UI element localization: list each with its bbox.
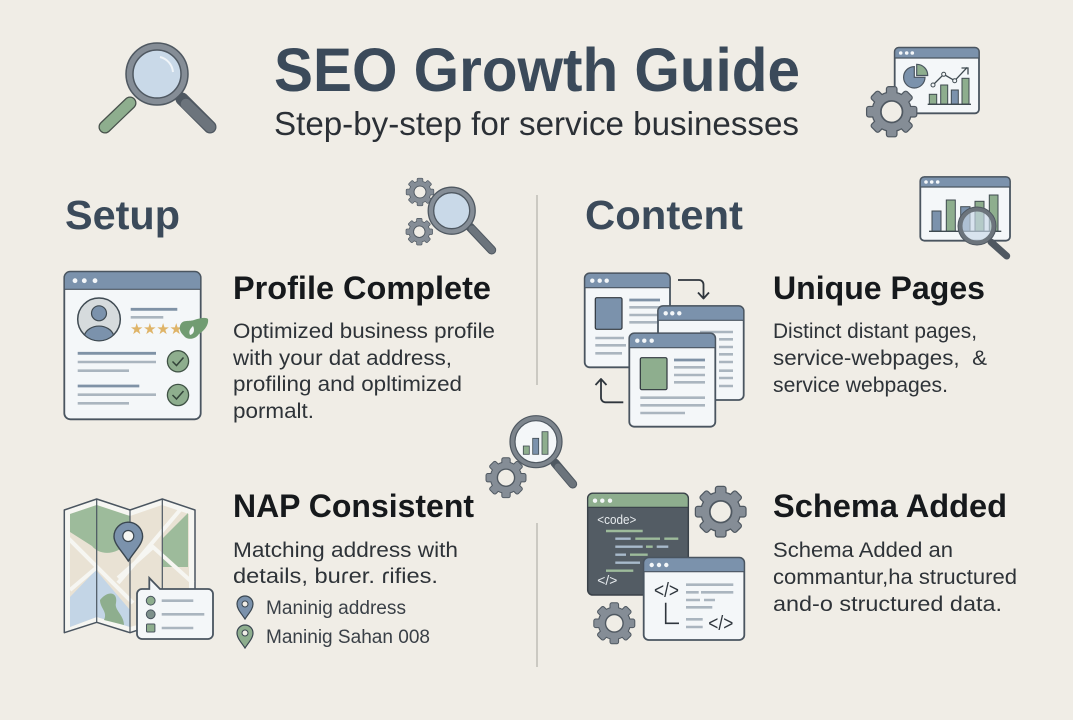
item text: profiling and opltimized — [233, 372, 462, 396]
icon: magnifier with gears — [406, 178, 492, 250]
item text: service-webpages, & — [773, 346, 987, 370]
item text — [773, 538, 1017, 616]
item heading: Schema Added — [773, 488, 1007, 524]
icon: magnifying glass with two handles — [105, 43, 210, 127]
list item: address: Maninig address — [266, 598, 406, 619]
item heading: NAP Consistent — [233, 488, 474, 524]
item text: details, buɾer. ɾifies. — [233, 564, 438, 588]
item text: Distinct distant pages, — [773, 319, 977, 343]
icon: code windows and gears: </> — [597, 572, 617, 588]
icon: profile window — [64, 272, 208, 419]
panel: NAP Consistent — [64, 488, 474, 648]
icon: folded map with pin — [64, 499, 213, 639]
icon: dashboard with gear — [867, 48, 979, 136]
item text: service webpages. — [773, 373, 948, 397]
item text: pormalt. — [233, 399, 314, 423]
item text: commantur,ha structured — [773, 565, 1017, 589]
panel: Unique Pages — [585, 270, 987, 427]
icon: stacked web pages — [585, 273, 744, 427]
item heading: Unique Pages — [773, 270, 985, 306]
icon: analytics magnifier with gear — [486, 416, 573, 497]
arrow: forward — [678, 280, 709, 298]
divider top — [536, 195, 538, 385]
panel: Profile Complete — [64, 270, 495, 423]
icon: code windows and gears: </> — [654, 580, 679, 602]
item text — [773, 319, 987, 397]
subtitle: Step-by-step for service businesses — [274, 106, 799, 143]
item text — [232, 319, 495, 423]
item text — [233, 538, 458, 588]
item text: Matching address with — [233, 538, 458, 562]
arrow: back — [596, 379, 623, 402]
icon: code windows and gears: </> — [708, 613, 733, 635]
panel: Schema Added — [588, 487, 1017, 643]
icon: chart window with magnifier — [920, 177, 1010, 256]
item text: with your dat address, — [232, 346, 452, 370]
item text: and-o structured data. — [773, 592, 1002, 616]
icon: code windows and gears: <code> — [597, 512, 636, 527]
list item: sahan: Maninig Sahan 008 — [266, 627, 430, 648]
heading: Setup: Setup — [65, 192, 180, 238]
item text: Schema Added an — [773, 538, 953, 562]
icon: code windows and gears — [588, 487, 745, 643]
heading: Content: Content — [585, 192, 743, 238]
divider bottom — [536, 523, 538, 667]
item heading: Profile Complete — [233, 270, 491, 306]
item text: Optimized business profile — [233, 319, 495, 343]
icon: profile window: ★★★★ — [130, 321, 183, 338]
title: SEO Growth Guide — [274, 36, 800, 104]
